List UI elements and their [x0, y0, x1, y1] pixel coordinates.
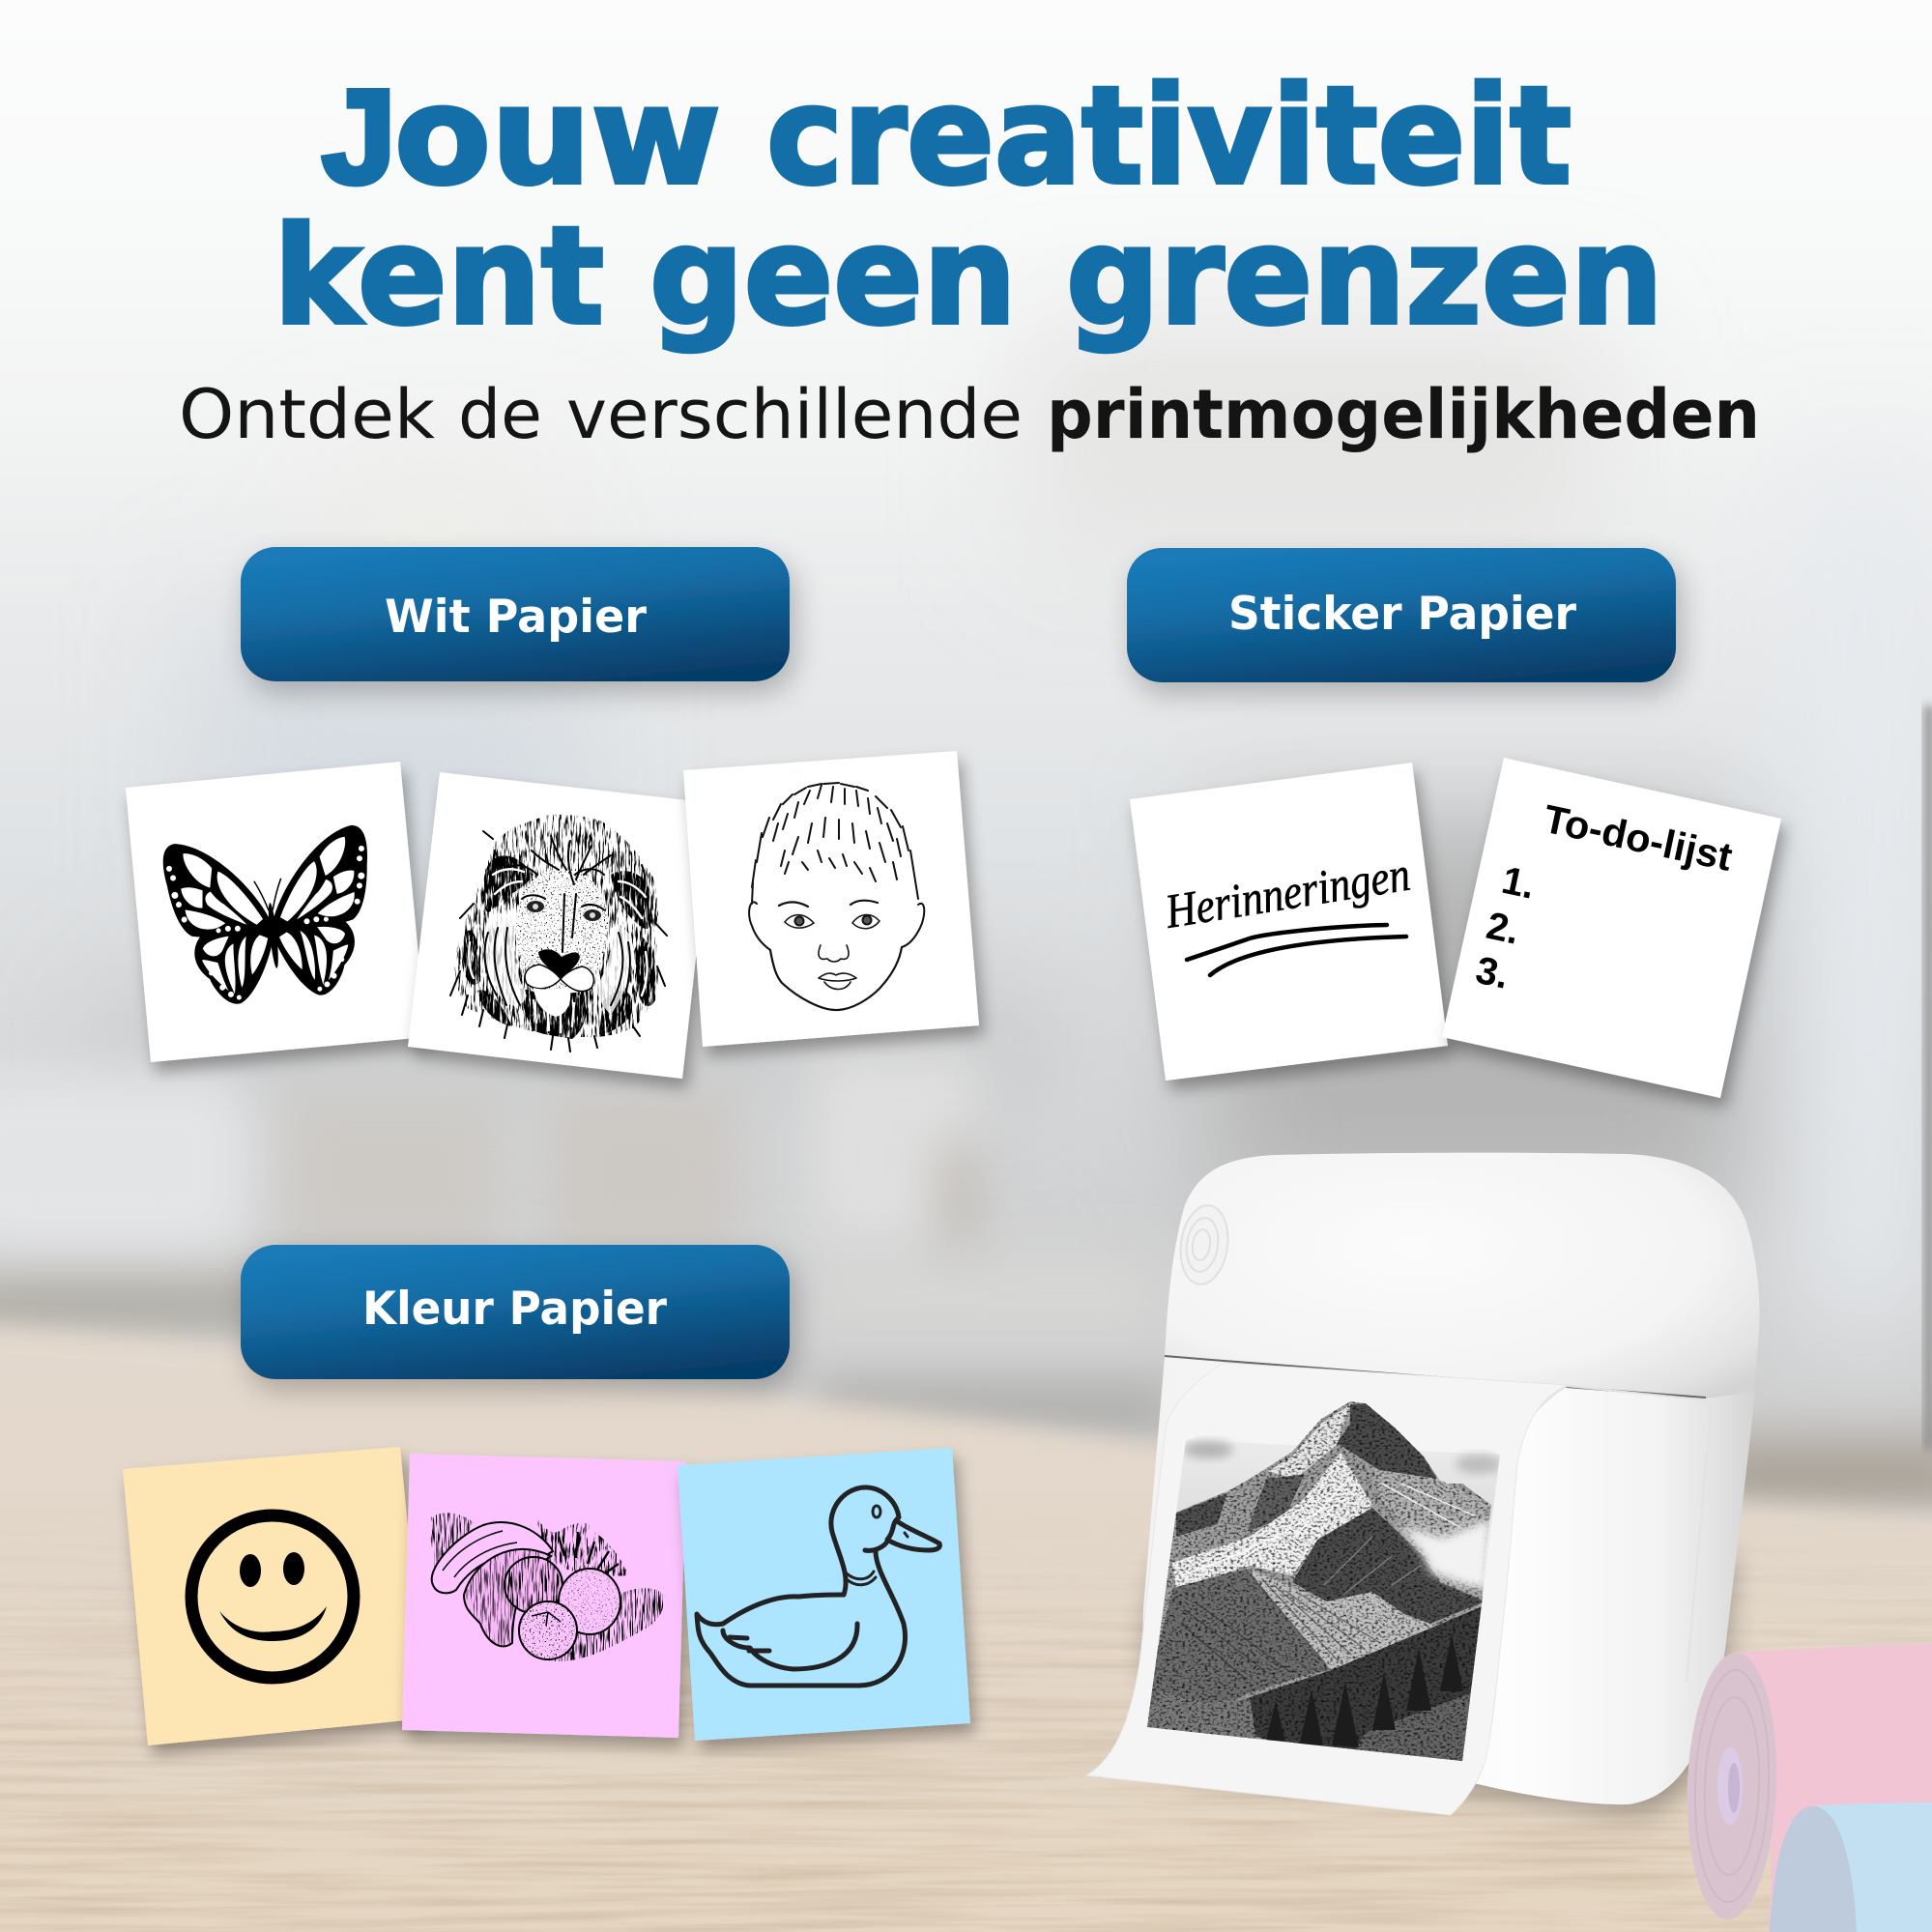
to-do list text: 2. [1483, 905, 1523, 953]
left rock [1176, 1493, 1227, 1537]
card: smiley on yellow paper [123, 1447, 426, 1745]
paper roll: pink [1683, 1644, 1932, 1932]
title: J [322, 63, 396, 212]
left ridge [1140, 1569, 1331, 1720]
printer lower housing [1143, 1357, 1755, 1804]
paper roll: blue [1770, 1802, 1932, 1932]
icon: fruit engraving [430, 1513, 663, 1661]
printer top housing [1165, 1153, 1759, 1421]
icon: butterfly [161, 823, 382, 1010]
icon: duck [697, 1487, 939, 1686]
subtitle: Ontdek [179, 375, 435, 454]
printed paper [1086, 1363, 1567, 1815]
table surface [0, 1324, 1932, 1932]
subtitle: printmogelijkheden [1047, 375, 1760, 454]
card: child face [683, 751, 979, 1047]
title: geen [649, 198, 1017, 356]
icon: smiley [191, 1515, 354, 1678]
mountain body [1140, 1401, 1491, 1769]
button: Sticker Papier: Sticker Papier [1228, 588, 1577, 641]
power button [1176, 1202, 1232, 1287]
button: Kleur Papier [241, 1245, 790, 1379]
button: Wit Papier [241, 547, 790, 681]
button: Sticker Papier [1127, 548, 1676, 682]
title: ouw [394, 58, 721, 216]
icon: lion head [450, 815, 667, 1052]
slot line and front panel [1165, 1356, 1706, 1398]
right streak face [1372, 1469, 1491, 1537]
subtitle: verschillende [566, 375, 1023, 454]
to-do list text: To-do-lijst [1540, 796, 1737, 879]
title: creativiteit [766, 58, 1572, 216]
dark north face [1337, 1403, 1437, 1479]
title [274, 58, 1663, 356]
title: kent [274, 198, 604, 356]
to-do list text [1472, 796, 1737, 997]
printer [1086, 1153, 1759, 1815]
subtitle: de [458, 375, 542, 454]
central dark rock [1292, 1508, 1485, 1624]
card: fruit on pink paper [402, 1454, 686, 1738]
central snow band [1172, 1453, 1372, 1588]
card: To-do-lijst sticker [1442, 758, 1781, 1098]
pine trees [1266, 1633, 1463, 1747]
card: Herinneringen sticker [1130, 763, 1448, 1081]
to-do list text: 1. [1498, 859, 1539, 908]
underline strokes [1187, 925, 1406, 975]
cloud [1399, 1517, 1491, 1590]
button: Kleur Papier: Kleur Papier [362, 1283, 668, 1336]
rock streak lines [1181, 1479, 1474, 1680]
script text: Herinneringen [1161, 847, 1414, 938]
forest and foothills [1247, 1604, 1486, 1769]
card: butterfly [126, 762, 426, 1062]
card: lion [408, 772, 713, 1079]
subtitle [179, 375, 1760, 454]
to-do list text: 3. [1472, 949, 1513, 997]
streaked lower slope [1247, 1569, 1486, 1670]
upper snow [1268, 1404, 1350, 1479]
button: Wit Papier: Wit Papier [385, 591, 648, 644]
card: duck on blue paper [678, 1448, 970, 1741]
icon: child portrait line drawing [749, 783, 924, 1010]
mountain picture [1140, 1401, 1502, 1769]
title: grenzen [1066, 198, 1663, 356]
